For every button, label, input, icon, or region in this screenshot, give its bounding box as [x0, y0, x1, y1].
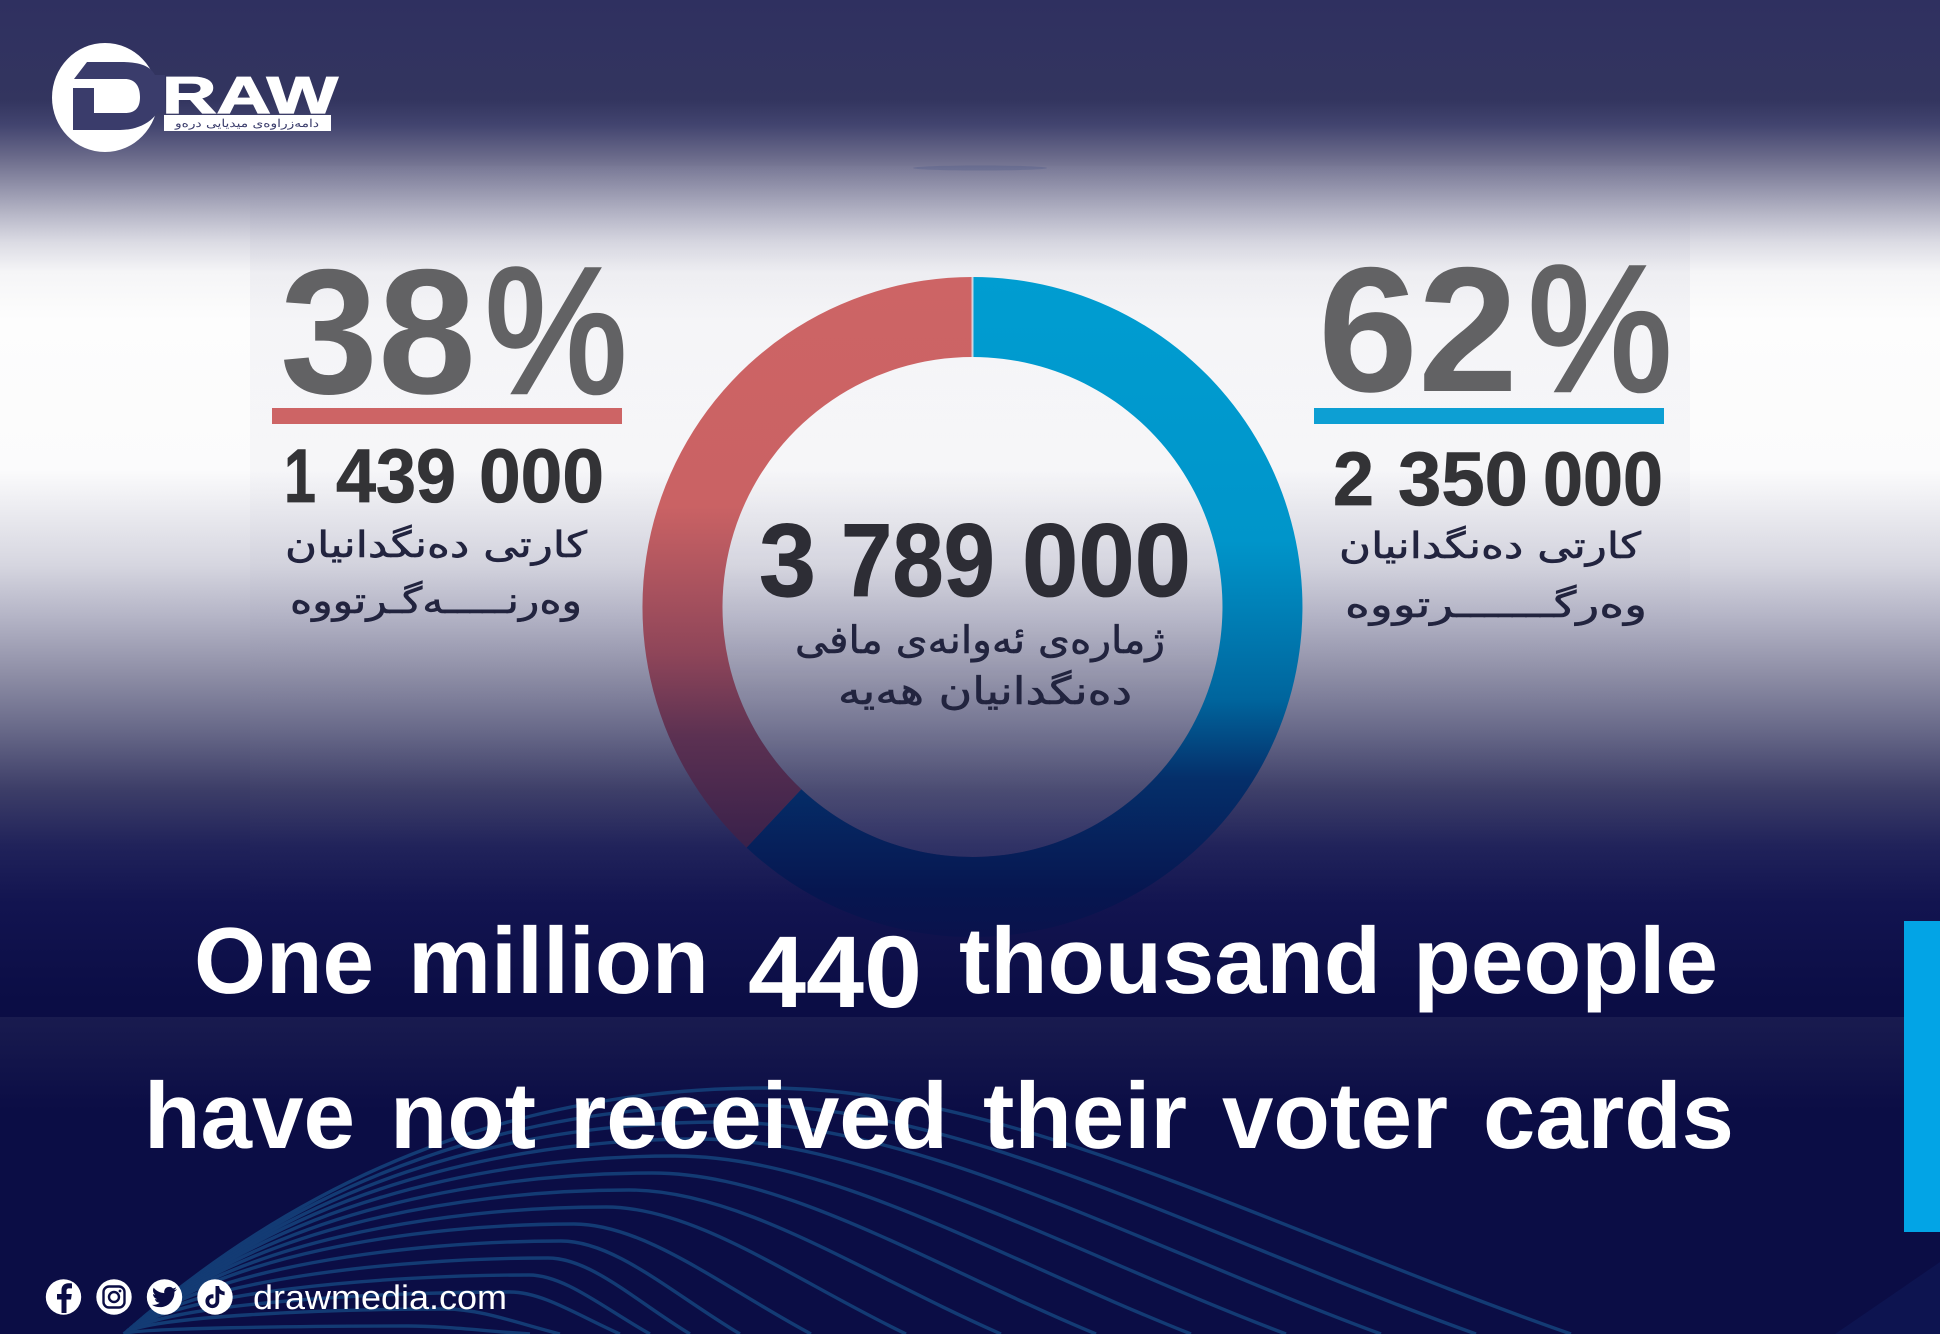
percentage: % [1528, 229, 1672, 428]
percentage: 38 [280, 232, 476, 431]
title line 2: received [570, 1063, 948, 1168]
bottom band [0, 1017, 1940, 1334]
number: 3 789 000: 3 [759, 503, 816, 619]
percentage: 62 [1318, 230, 1518, 429]
title [144, 908, 1734, 1168]
right stat: 62% [1314, 229, 1672, 626]
title line 2: their [983, 1063, 1187, 1168]
segment: 38% red [642, 277, 972, 848]
panel top sliver [913, 166, 1047, 170]
footer [46, 1279, 507, 1317]
caption line 1: کارتی دەنگدانیان [285, 524, 588, 566]
title line 2: cards [1483, 1063, 1734, 1168]
logo wordmark: RAW [162, 67, 339, 125]
title line 1: thousand [959, 908, 1381, 1013]
count: 000 [1543, 437, 1663, 522]
title line 2: voter [1222, 1063, 1448, 1168]
count: 439 [336, 434, 456, 519]
website: drawmedia.com [253, 1279, 507, 1317]
logo tagline strip [164, 115, 331, 131]
blue rule [1314, 408, 1664, 424]
red rule [272, 408, 622, 424]
center total [759, 503, 1191, 713]
corner wave accent [1835, 1262, 1940, 1334]
title line 2 [144, 1063, 1734, 1168]
icon: twitter [147, 1279, 182, 1315]
inner disc [722, 357, 1222, 857]
label: rights holders line 2: دەنگدانیان هەیە [838, 669, 1132, 713]
center divider [972, 277, 974, 357]
percentage [1318, 229, 1672, 429]
count: 000 [479, 434, 604, 519]
number: 3 789 000: 789 [841, 503, 995, 619]
icon: facebook [46, 1279, 81, 1315]
number: 3 789 000: 000 [1022, 503, 1191, 619]
title line 1 [194, 908, 1718, 1029]
title line 2: not [390, 1063, 536, 1168]
left stat: 38% [272, 231, 627, 622]
title line 2: have [144, 1063, 355, 1168]
segment: 62% blue [747, 277, 1302, 937]
decorative wave lines [124, 1088, 1571, 1334]
percentage [280, 231, 627, 431]
caption line 2: وەرگـــــــرتووە [1345, 584, 1647, 626]
title line 1: One [194, 908, 374, 1013]
number: 3 789 000 [759, 503, 1191, 619]
count: 2 [1333, 437, 1374, 522]
logo [52, 43, 339, 152]
count [1333, 437, 1663, 522]
icon: instagram [96, 1279, 132, 1315]
title line 1: million [408, 908, 709, 1013]
count [284, 434, 604, 519]
donut chart [642, 277, 1302, 937]
title line 1: 440 [748, 915, 922, 1029]
icon: tiktok [197, 1279, 233, 1315]
count: 350 [1398, 437, 1528, 522]
count: 1 [284, 434, 316, 519]
background panel [250, 166, 1690, 920]
logo circle mark [52, 43, 165, 152]
caption line 2: وەرنـــــەگـرتووە [290, 580, 582, 622]
percentage: % [485, 231, 627, 430]
logo tagline: دامەزراوەی میدیایی درەو [174, 117, 319, 130]
label: rights holders line 1: ژمارەی ئەوانەی مافی [795, 618, 1165, 663]
title line 1: people [1413, 908, 1718, 1013]
caption line 1: کارتی دەنگدانیان [1339, 525, 1642, 567]
blue side bar [1904, 921, 1940, 1232]
